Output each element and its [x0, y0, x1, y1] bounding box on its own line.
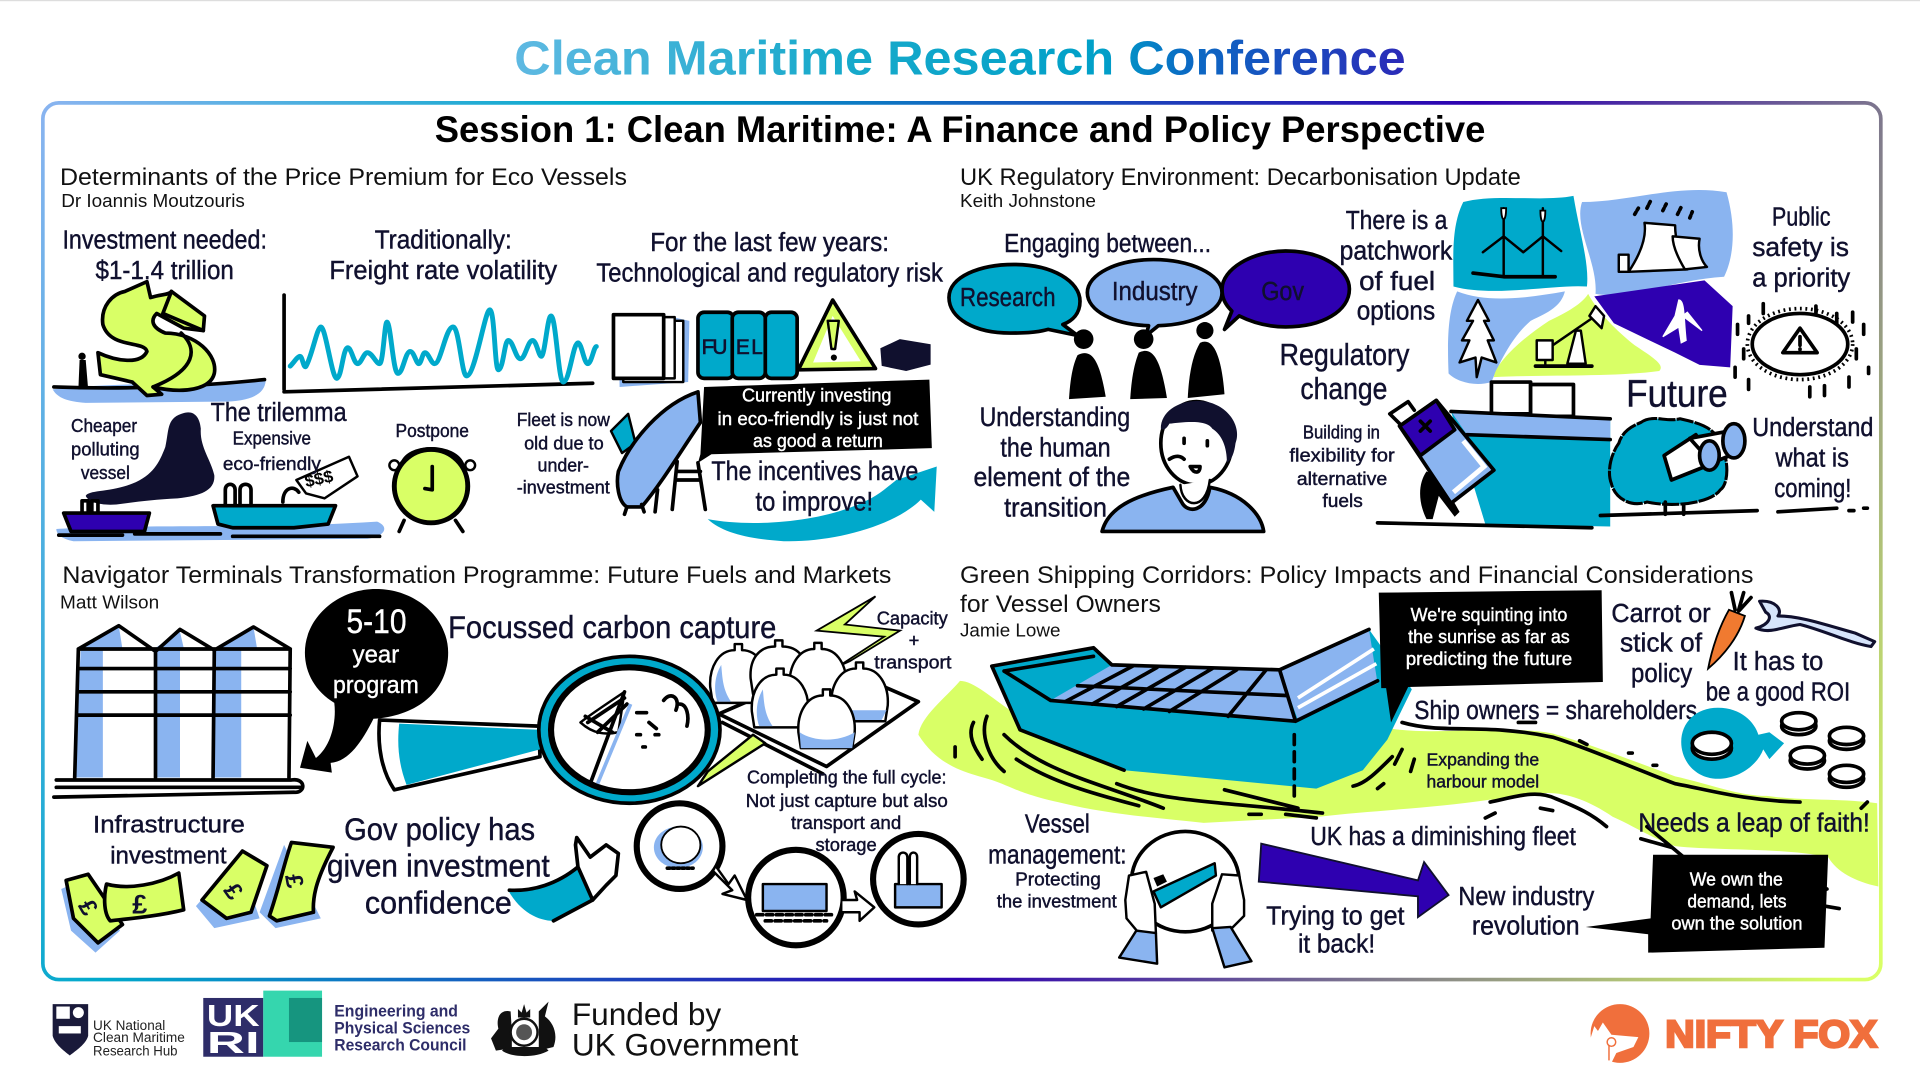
text: understand what is coming: what is [1775, 445, 1849, 473]
text: good ROI: be a good ROI [1706, 678, 1850, 706]
text: new industry revolution [1458, 883, 1594, 940]
icon: banknotes: £ [218, 878, 248, 905]
text: future: Future [1626, 374, 1728, 416]
icon: stick [1756, 601, 1875, 647]
speaker: Jamie Lowe: Jamie Lowe [960, 620, 1060, 641]
icon: banknotes: £ [279, 872, 308, 891]
footer: funded by UK Government: UK Government [572, 1027, 799, 1063]
icon: banknotes: £ [72, 895, 103, 921]
text: patchwork of fuel options [1340, 207, 1452, 326]
icon: hands holding globe with ship [1119, 831, 1251, 967]
arrow: incentives [708, 467, 937, 541]
footer: UKRI logo: RI [207, 1026, 260, 1060]
text: gov policy: Gov policy has [344, 811, 535, 847]
icon: three people [1069, 322, 1224, 399]
speech bubble: research: Research [960, 284, 1056, 312]
text: building in flexibility: fuels [1322, 490, 1363, 511]
text: gov policy [327, 811, 550, 920]
icon: lime river [918, 681, 1878, 909]
text: vessel management: the investment [997, 890, 1117, 911]
text: new industry revolution: revolution [1472, 912, 1580, 940]
text: expensive eco-friendly: eco-friendly [223, 453, 322, 474]
icon: trilemma boats [56, 412, 384, 541]
heading: green shipping corridors [960, 562, 1753, 618]
text: carrot or stick: Carrot or [1611, 600, 1711, 628]
text: carrot or stick: stick of [1620, 629, 1703, 657]
text: trying to get it back: Trying to get [1266, 902, 1404, 930]
text: investment needed: $1-1.4 trillion [96, 257, 234, 285]
text: ship owners shareholders: Ship owners = shareholders [1414, 697, 1697, 725]
text: needs a leap of faith: Needs a leap of faith! [1638, 809, 1870, 837]
text: expanding the harbour model: harbour model [1427, 771, 1539, 791]
text: completing the full cycle [746, 767, 948, 855]
speech bubble: industry: Industry [1112, 278, 1198, 306]
text: regulatory change [1280, 338, 1410, 406]
text: capacity transport: transport [874, 652, 951, 673]
text: building in flexibility: flexibility for [1289, 445, 1395, 466]
footer: UK National Clean Maritime Research Hub logo [53, 1004, 185, 1059]
text: patchwork of fuel options: options [1357, 298, 1435, 326]
text: understanding the human: the human [1000, 433, 1111, 463]
text: fleet is now old: -investment [517, 476, 610, 497]
text: regulatory change: Regulatory [1280, 338, 1410, 372]
text: vessel management: Protecting [1015, 868, 1101, 889]
icon: storage tanks on platform [698, 640, 918, 786]
text: understand what is coming [1752, 414, 1873, 503]
icon: process circles [637, 803, 964, 945]
text: good ROI [1706, 648, 1850, 706]
text: good ROI: It has to [1733, 648, 1823, 676]
panel: price premium [53, 164, 943, 541]
speech bubble: gov: Gov [1261, 278, 1304, 306]
footer: EPSRC text [334, 1001, 470, 1055]
text: investment needed [62, 227, 267, 285]
icon: old ship on crutches [611, 392, 705, 514]
speaker: Dr Ioannis Moutzouris: Dr Ioannis Moutzouris [61, 190, 245, 211]
icon: container ship [992, 629, 1412, 796]
footer: Nifty Fox logo [1589, 1004, 1877, 1063]
text: patchwork of fuel options: patchwork [1340, 238, 1452, 266]
text: completing the full cycle: Not just capture but also [746, 790, 948, 811]
footer: UK National Clean Maritime Research Hub logo: Research Hub [93, 1044, 178, 1059]
icon: public safety circle [1735, 304, 1869, 397]
icon: fuel barrels: EL [736, 336, 763, 359]
text: incentives have to improve: to improve! [756, 487, 873, 517]
text: capacity transport: + [909, 630, 919, 651]
text: fleet is now old: old due to [524, 432, 604, 453]
text: expensive eco-friendly: Expensive [233, 427, 311, 448]
text: UK diminishing fleet: UK has a diminishing fleet [1310, 823, 1576, 851]
text: understanding the human: element of the [973, 462, 1130, 492]
text: incentives have to improve: The incentives have [711, 456, 918, 486]
text: the trilemma: The trilemma [211, 399, 347, 427]
main frame [43, 103, 1881, 980]
icon: warning triangle [798, 300, 876, 370]
footer: UK National Clean Maritime Research Hub logo: Clean Maritime [93, 1030, 185, 1045]
footer: EPSRC text: Engineering and [334, 1001, 458, 1020]
icon: banknotes [61, 842, 333, 953]
icon: storage silos [54, 626, 303, 797]
text: fleet is now old: under- [538, 454, 589, 475]
title: Clean Maritime Research Conference [514, 33, 1406, 86]
icon: tree with binoculars [1600, 418, 1867, 516]
text: vessel management: management: [988, 841, 1127, 869]
icon: carrot [1708, 593, 1751, 669]
text: engaging between: Engaging between... [1004, 230, 1211, 258]
callout: we own the demand [1586, 855, 1828, 953]
callout: currently investing: in eco-friendly is just not [718, 408, 918, 429]
speech bubble: research [949, 264, 1080, 336]
text: expanding the harbour model [1427, 749, 1539, 791]
callout: squinting into the sunrise: We're squinting into [1411, 604, 1567, 625]
session heading: Session 1: Clean Maritime: A Finance and Policy Perspective [435, 109, 1485, 150]
icon: lightning bolt [817, 596, 900, 666]
callout: squinting into the sunrise: predicting the future [1406, 648, 1572, 669]
icon: person portrait [1102, 401, 1264, 531]
text: gov policy: given investment [327, 848, 550, 884]
text: capacity transport [874, 607, 951, 673]
text: building in flexibility: Building in [1303, 421, 1380, 442]
speech bubble: industry [1087, 260, 1222, 336]
text: last few years: Technological and regulatory risk [596, 260, 943, 288]
text: last few years [596, 229, 943, 288]
footer: UK National Clean Maritime Research Hub logo: UK National [93, 1018, 165, 1033]
text: patchwork of fuel options: of fuel [1359, 268, 1435, 296]
heading: green shipping corridors: for Vessel Owners [960, 591, 1161, 618]
text: completing the full cycle: transport and [791, 812, 901, 833]
text: understanding the human [973, 402, 1130, 523]
footer: Nifty Fox logo: NIFTY FOX [1665, 1014, 1877, 1056]
text: vessel management: Vessel [1025, 811, 1090, 839]
text: trying to get it back: it back! [1298, 931, 1375, 959]
callout: 5-10 year program: year [353, 641, 399, 668]
text: fleet is now old [517, 409, 610, 497]
text: understanding the human: transition [1004, 493, 1107, 523]
text: cheaper polluting vessel [71, 415, 140, 483]
chart: freight rate volatility [284, 227, 596, 392]
callout: currently investing: Currently investing [742, 385, 891, 406]
text: traditionally [329, 227, 557, 285]
text: new industry revolution: New industry [1458, 883, 1594, 911]
footer: UKRI logo: UK [207, 999, 260, 1033]
text: patchwork of fuel options: There is a [1346, 207, 1448, 235]
text: incentives have to improve [711, 456, 918, 517]
text: investment needed: Investment needed: [62, 227, 267, 255]
footer: funded by UK Government: Funded by [572, 996, 721, 1032]
text: completing the full cycle: Completing the full cycle: [747, 767, 947, 788]
text: cheaper polluting vessel: vessel [81, 462, 130, 483]
callout: we own the demand: We own the [1690, 868, 1783, 889]
text: completing the full cycle: storage [816, 834, 877, 855]
text: building in flexibility: alternative [1297, 468, 1387, 489]
text: public safety [1752, 203, 1850, 293]
text: carrot or stick [1611, 600, 1711, 688]
text: vessel management [988, 811, 1127, 911]
text: fleet is now old: Fleet is now [517, 409, 610, 430]
text: trying to get it back [1266, 902, 1404, 959]
text: public safety: safety is [1752, 234, 1849, 262]
icon: thumbs up arm [508, 838, 618, 921]
icon: coins with arrow [1681, 708, 1864, 787]
callout: currently investing: as good a return [753, 430, 883, 451]
text: gov policy: confidence [365, 884, 512, 920]
text: expanding the harbour model: Expanding the [1427, 749, 1539, 769]
text: understand what is coming: coming! [1774, 475, 1851, 503]
callout: currently investing [698, 380, 932, 463]
callout: squinting into the sunrise [1379, 590, 1603, 722]
arrow: purple [1259, 844, 1449, 917]
text: postpone: Postpone [396, 420, 469, 441]
icon: fuel barrels: FU [702, 336, 727, 359]
text: public safety: Public [1772, 203, 1831, 231]
panel: navigator terminals [54, 562, 964, 953]
icon: ship with battery [1378, 382, 1610, 528]
text: infrastructure investment: Infrastructure [93, 812, 245, 839]
heading: UK regulatory: UK Regulatory Environment: Decarbonisation Update [960, 164, 1521, 191]
text: focussed carbon capture: Focussed carbon capture [448, 609, 776, 645]
text: carrot or stick: policy [1631, 660, 1692, 688]
heading: green shipping corridors: Green Shipping Corridors: Policy Impacts and Financial Considerations [960, 562, 1753, 589]
text: cheaper polluting vessel: polluting [71, 439, 140, 460]
footer: EPSRC text: Research Council [334, 1036, 467, 1055]
panel: UK regulatory environment [949, 164, 1873, 531]
footer: UKRI logo [203, 991, 322, 1060]
footer: royal crest [491, 1002, 555, 1056]
speaker: Matt Wilson: Matt Wilson [60, 592, 159, 613]
icon: banknotes: £ [132, 889, 147, 919]
text: public safety: a priority [1752, 265, 1850, 293]
text: cheaper polluting vessel: Cheaper [71, 415, 137, 436]
text: regulatory change: change [1300, 372, 1387, 406]
callout: we own the demand: demand, lets [1687, 890, 1787, 911]
icon: fuel patchwork map [1448, 190, 1733, 384]
icon: fuel barrels [698, 312, 797, 378]
icon: dollar sign on island [53, 282, 266, 403]
callout: we own the demand: own the solution [1671, 912, 1802, 933]
heading: navigator terminals: Navigator Terminals Transformation Programme: Future Fuels and Markets [62, 562, 891, 589]
text: traditionally: Freight rate volatility [329, 257, 557, 285]
icon: documents [613, 315, 689, 387]
callout: 5-10 year program [300, 589, 448, 773]
callout: 5-10 year program: program [333, 672, 419, 699]
icon: alarm clock [389, 449, 475, 531]
text: infrastructure investment: investment [110, 842, 227, 869]
text: traditionally: Traditionally: [375, 227, 512, 255]
footer: funded by UK Government [572, 996, 799, 1063]
text: understanding the human: Understanding [980, 402, 1130, 432]
speech bubble: gov [1222, 251, 1349, 329]
footer: EPSRC text: Physical Sciences [334, 1018, 470, 1037]
speaker: Keith Johnstone: Keith Johnstone [960, 190, 1096, 211]
heading: price premium: Determinants of the Price Premium for Eco Vessels [60, 164, 627, 191]
icon: trilemma boats: $$$ [303, 466, 335, 491]
text: building in flexibility [1289, 421, 1395, 511]
text: expensive eco-friendly [223, 427, 322, 474]
panel: green shipping corridors [918, 562, 1878, 967]
callout: 5-10 year program: 5-10 [347, 603, 407, 641]
text: understand what is coming: Understand [1752, 414, 1873, 442]
text: last few years: For the last few years: [650, 229, 889, 257]
text: capacity transport: Capacity [877, 607, 949, 628]
icon: dark cube [882, 340, 929, 370]
text: infrastructure investment [93, 812, 245, 869]
callout: squinting into the sunrise: the sunrise as far as [1408, 626, 1570, 647]
icon: magnifying glass [379, 656, 720, 803]
